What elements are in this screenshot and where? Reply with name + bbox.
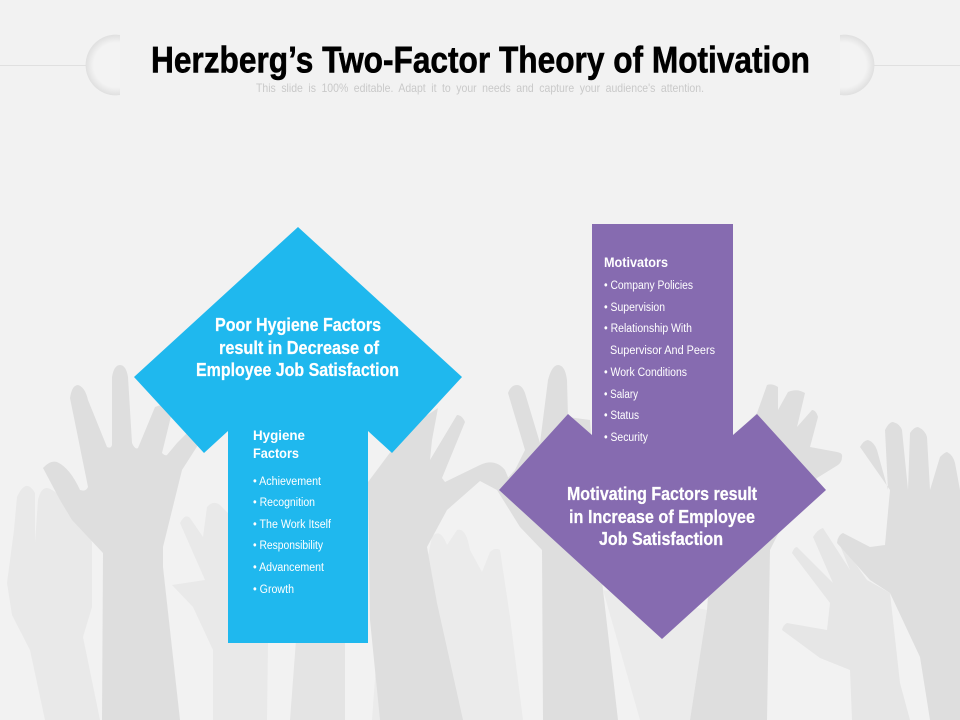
arrow heading: Job Satisfaction: [599, 529, 723, 549]
large hand far right: [837, 422, 960, 720]
arrow heading: [196, 315, 399, 380]
hygiene factors list: [253, 476, 332, 596]
large hand under purple arrow left: [497, 365, 618, 720]
hygiene factors heading: [253, 427, 305, 461]
hygiene factors list: • Advancement: [253, 562, 325, 574]
motivators list: • Company Policies: [604, 280, 693, 292]
hygiene factors list: • The Work Itself: [253, 519, 332, 531]
motivators heading: Motivators: [604, 254, 668, 270]
light hand centre: [372, 530, 523, 720]
motivators list: • Salary: [604, 389, 638, 401]
motivators list: • Status: [604, 410, 639, 422]
hygiene factors list: • Recognition: [253, 497, 315, 509]
light hand far left: [7, 486, 100, 720]
right bracket: [840, 35, 874, 95]
arrow heading: Motivating Factors result: [567, 484, 757, 504]
arrow heading: in Increase of Employee: [569, 507, 755, 527]
background raised hands illustration: [7, 365, 960, 720]
header rule right: [874, 65, 960, 66]
light hand lower right: [782, 528, 910, 720]
motivators list: Supervisor And Peers: [610, 345, 715, 357]
blue arrow shape: [134, 227, 462, 643]
title: Herzberg’s Two-Factor Theory of Motivation: [151, 40, 810, 80]
panel: motivators down arrow: [499, 224, 826, 639]
subtitle: This slide is 100% editable. Adapt it to your needs and capture your audience's attention.: [256, 81, 704, 95]
light hand behind blue stem: [172, 503, 270, 720]
arrow heading: Employee Job Satisfaction: [196, 360, 399, 380]
panel: hygiene factors up arrow: [134, 227, 462, 643]
hygiene factors heading: Hygiene: [253, 427, 305, 443]
left bracket: [86, 35, 120, 95]
medium arm under blue stem: [290, 640, 345, 720]
arrow heading: result in Decrease of: [219, 338, 380, 358]
large hand under purple arrow right: [690, 384, 842, 720]
arrow heading: [567, 484, 757, 549]
purple arrow shape: [499, 224, 826, 639]
motivators list: • Work Conditions: [604, 367, 687, 379]
motivators list: • Security: [604, 432, 648, 444]
arrow heading: Poor Hygiene Factors: [215, 315, 381, 335]
hygiene factors list: • Growth: [253, 584, 294, 596]
hygiene factors heading: Factors: [253, 445, 299, 461]
header rule left: [0, 65, 86, 66]
motivators list: [604, 280, 715, 444]
motivators list: • Relationship With: [604, 323, 692, 335]
large hand left: [43, 365, 198, 720]
hygiene factors list: • Achievement: [253, 476, 322, 488]
motivators list: • Supervision: [604, 302, 665, 314]
title frame: [0, 35, 960, 95]
light arm under purple arrow: [603, 590, 707, 720]
large hand centre-left: [368, 408, 510, 720]
hygiene factors list: • Responsibility: [253, 540, 323, 552]
